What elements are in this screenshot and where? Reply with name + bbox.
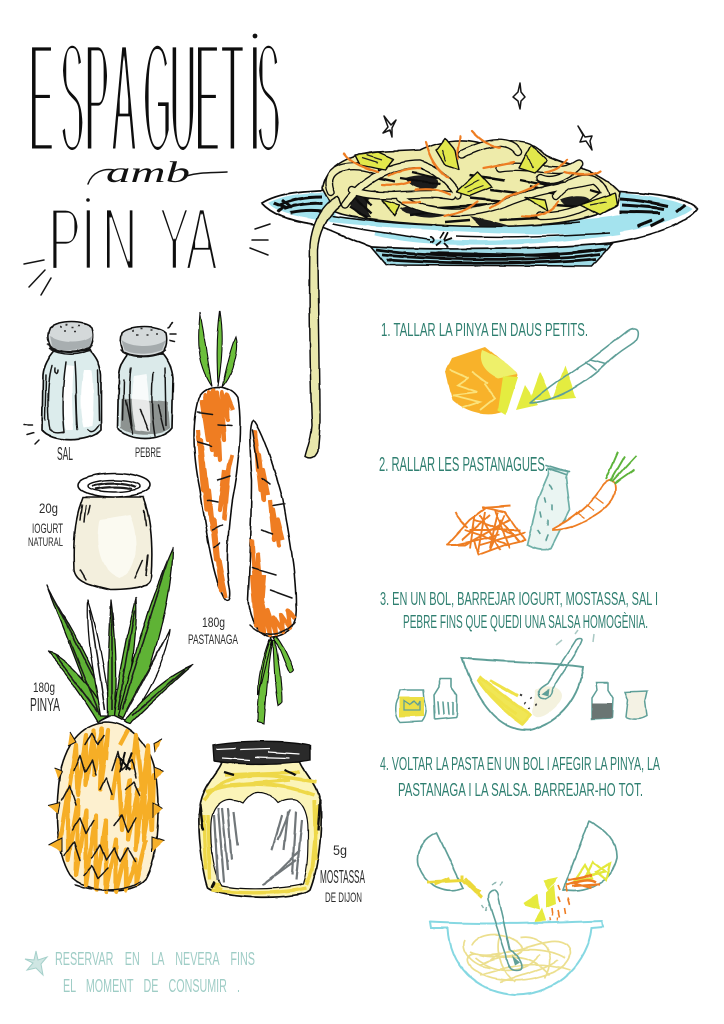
carrot shreds [344,131,600,216]
title: amb [88,156,227,189]
right bowl pouring pineapple [563,821,617,891]
wooden spoon [488,890,522,970]
step 1 illustration: cutting pineapple [445,328,638,415]
large serving bowl [430,921,603,995]
mustard lid [213,741,310,764]
grater [527,468,570,550]
label: 180g PINYA: 180g [33,679,55,695]
ingredient: second carrot with leaves below [248,420,296,724]
mustard label [211,792,308,889]
decorative stars above the plate [383,83,592,150]
note: fridge reminder [55,949,255,996]
pineapple leaves [47,548,193,724]
ingredient: pepper shaker [118,323,176,438]
ingredient: salt shaker [24,322,101,444]
label: 20g IOGURT NATURAL: NATURAL [28,535,63,549]
noodle ribbons [329,143,606,216]
ingredient: natural yogurt jar [74,473,152,590]
label: 20g IOGURT NATURAL: IOGURT [32,520,63,536]
ingredient: Dijon mustard jar [199,741,321,897]
title: ESPAGUETIS: ESPAGUETIS [29,8,280,187]
mixing bowl [462,658,583,730]
step 1 text: 1. TALLAR LA PINYA EN DAUS PETITS. [381,320,588,340]
title: PINYA: PINYA [49,190,218,290]
ingredient: pineapple [47,548,193,892]
mini pepper bottle [592,683,613,719]
label: 20g IOGURT NATURAL: 20g [39,500,58,516]
step 4 illustration: combining everything [417,821,617,995]
step 2 illustration: grated carrot, grater and carrot [447,452,636,555]
mini yogurt [625,691,647,719]
illustration: hanging spaghetti strand [305,196,341,458]
recipe infographic canvas: MOSTASSA [320,867,365,887]
note: fridge reminder: RESERVAR EN LA NEVERA FINS [55,949,255,969]
label: 180g PASTANAGA [188,614,238,647]
illustration: plate of spaghetti [262,131,697,266]
step 2 text: 2. RALLAR LES PASTANAGUES. [379,454,548,476]
recipe infographic canvas: SAL [57,444,73,464]
note: star icon [25,951,47,975]
left bowl pouring sauce [417,833,463,890]
pineapple body [57,722,158,891]
label: PEBRE: PEBRE [135,444,161,460]
label: 5g MOSTASSA DE DIJON: 5g [333,842,347,858]
step 4 text [380,754,660,800]
title: amb: amb [106,156,190,189]
pineapple chunks [355,138,617,216]
title: dot on the I [253,34,257,38]
note: fridge reminder: EL MOMENT DE CONSUMIR . [63,976,240,996]
ingredient: carrot with leaves on top [194,311,240,601]
label: 20g IOGURT NATURAL [28,500,63,549]
step 3 text [380,589,658,632]
plate body [262,190,697,249]
title sparkle marks [24,224,270,295]
mixing spoon [538,638,582,699]
label: 180g PINYA [30,679,60,715]
plate ornament [430,232,452,247]
pasta mound [322,140,620,226]
grated carrot pile [447,506,525,555]
whole carrot [553,481,615,530]
title: dot on the I of PINYA [86,198,90,202]
step 3 illustration: mixing the sauce [395,630,647,730]
falling carrot shreds [550,885,570,921]
label: 180g PINYA: PINYA [30,695,60,715]
label: 5g MOSTASSA DE DIJON [320,842,365,905]
label: 5g MOSTASSA DE DIJON: DE DIJON [325,889,362,905]
label: 180g PASTANAGA: PASTANAGA [188,631,238,647]
spaghetti in bowl [464,934,570,982]
label: 180g PASTANAGA: 180g [202,614,225,630]
mini mustard jar [395,690,426,722]
plate foot [370,244,612,266]
plate rim shading [274,197,668,213]
falling pineapple cubes [524,877,558,922]
mini salt bottle [434,679,457,719]
